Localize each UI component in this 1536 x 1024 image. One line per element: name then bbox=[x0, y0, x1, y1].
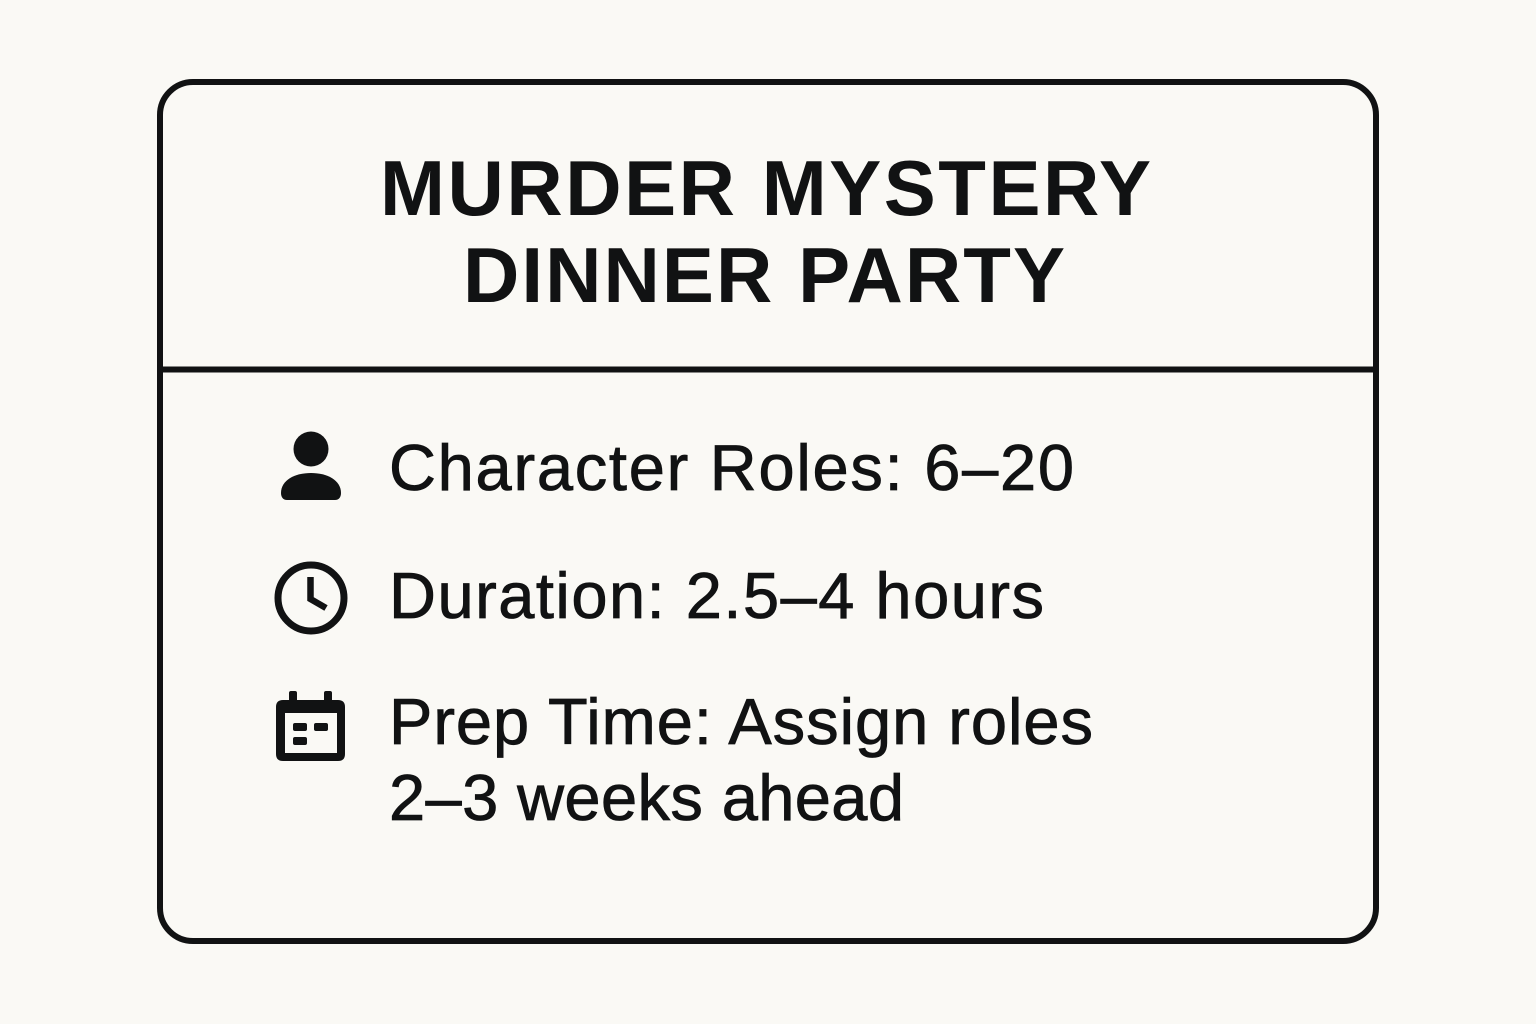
text: prep time: 2–3 weeks ahead bbox=[389, 761, 904, 834]
icon: person bbox=[281, 432, 341, 500]
title: DINNER PARTY bbox=[463, 231, 1065, 319]
text: character roles: Character Roles: 6–20 bbox=[389, 431, 1074, 504]
icon: clock bbox=[278, 565, 344, 631]
panel: card outline bbox=[160, 82, 1376, 941]
title: MURDER MYSTERY bbox=[380, 144, 1151, 232]
title bbox=[380, 144, 1151, 319]
text: duration: Duration: 2.5–4 hours bbox=[389, 559, 1044, 632]
text: prep time bbox=[389, 685, 1093, 834]
icon: calendar bbox=[276, 691, 345, 761]
text: prep time: Prep Time: Assign roles bbox=[389, 685, 1093, 758]
